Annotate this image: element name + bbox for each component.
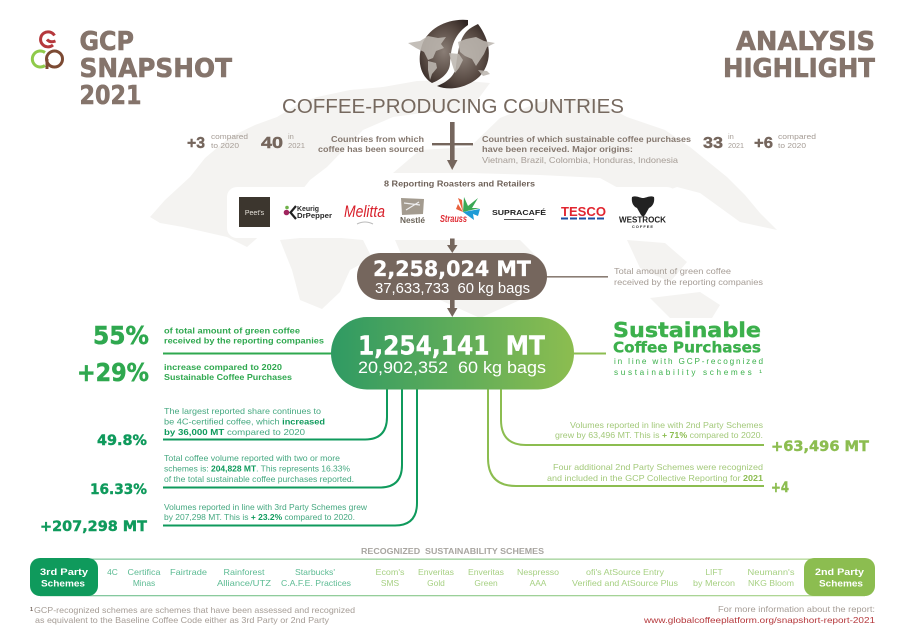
stats: sustainable purchase countries [482, 132, 816, 165]
2nd party scheme names: by Mercon [693, 578, 735, 588]
footnote: as equivalent to the Baseline Coffee Code either as 3rd Party or 2nd Party [35, 616, 330, 625]
stat: plus 63,496 MT: grew by 63,496 MT. This is + 71% compared to 2020. [555, 430, 763, 440]
2nd party scheme names: SMS [381, 578, 399, 588]
note: total amount: received by the reporting companies [614, 278, 763, 287]
sustainable purchases pill: 20,902,352 60 kg bags [358, 359, 546, 377]
footnote [30, 606, 355, 625]
stat: plus 4 [547, 462, 789, 496]
badge: 2nd party: Schemes [819, 578, 863, 590]
background world map [150, 80, 777, 318]
stat: plus 4: +4 [771, 480, 789, 496]
2nd party scheme names: Enveritas [418, 567, 454, 577]
logo: Keurig Dr Pepper [284, 204, 332, 220]
note: total amount: Total amount of green coffee [614, 267, 731, 276]
logo: Nestle: Nestlé [400, 216, 426, 225]
panel: schemes bar [30, 558, 875, 596]
title: Analysis Highlight [723, 27, 876, 84]
stat: plus 207,298 MT [40, 502, 368, 535]
source link [643, 605, 876, 625]
logo: Tesco: TESCO [561, 204, 606, 219]
stat: plus 29 percent: +29% [77, 358, 149, 387]
stats: sustainable purchase countries: Countries of which sustainable coffee purchases [482, 135, 691, 144]
heading: sustainable coffee purchases: Coffee Purchases [613, 338, 761, 356]
logo: Strauss: Strauss [440, 214, 467, 225]
connectors: right branches [488, 354, 764, 486]
total green coffee pill: 37,633,733 60 kg bags [375, 281, 530, 297]
sustainable purchases pill: 1,254,141 MT [358, 332, 545, 362]
badge: 3rd party [30, 558, 98, 596]
2nd party scheme names: AAA [530, 578, 547, 588]
stat: plus 29 percent: increase compared to 2020 [164, 363, 282, 372]
stat: 55 percent: received by the reporting companies [164, 336, 324, 346]
3rd party scheme names: 4C [107, 567, 118, 577]
stat: plus 207,298 MT: +207,298 MT [40, 519, 147, 535]
logo: Westrock [619, 196, 667, 229]
2nd party scheme names: LIFT [705, 567, 723, 577]
2nd party scheme names: Neumann's [748, 567, 794, 577]
2nd party scheme names: Green [474, 578, 498, 588]
footnote: 1 [30, 607, 33, 613]
2nd party scheme names [376, 567, 794, 588]
sustainable purchases pill [331, 317, 574, 390]
stat: 16.33 percent [90, 453, 354, 498]
stat: plus 63,496 MT [555, 420, 869, 455]
stat: plus 207,298 MT: by 207,298 MT. This is + 23.2% compared to 2020. [164, 512, 355, 522]
stats: countries sourced: coffee has been sourced [318, 145, 424, 154]
2nd party scheme names: Enveritas [468, 567, 504, 577]
badge: 3rd party: 3rd Party [40, 567, 89, 578]
2nd party scheme names: Gold [427, 578, 445, 588]
stat: 55 percent [93, 321, 324, 350]
arrow: total to sustainable [447, 300, 458, 317]
logo: Westrock: WESTROCK [619, 214, 667, 224]
connector: total note [545, 276, 608, 278]
3rd party scheme names: Certifica [128, 567, 161, 577]
title: GCP Snapshot 2021: 2021 [80, 81, 142, 111]
3rd party scheme names: Fairtrade [170, 567, 207, 577]
stat: 49.8 percent: by 36,000 MT compared to 2020 [164, 427, 305, 437]
heading: sustainable coffee purchases: sustainability schemes ¹ [614, 368, 762, 377]
connectors: left branches [163, 354, 417, 526]
stat: 55 percent: 55% [93, 321, 149, 350]
3rd party scheme names: C.A.F.E. Practices [281, 578, 351, 588]
logo: GCP [32, 32, 62, 69]
stat: 16.33 percent: Total coffee volume reported with two or more [164, 453, 340, 463]
3rd party scheme names: Minas [133, 578, 155, 588]
logo: Supracafe [492, 208, 546, 220]
stats: sustainable purchase countries: in [728, 132, 734, 141]
source link: www.globalcoffeeplatform.org/snapshort-report-2021 [643, 616, 876, 625]
stats: countries sourced: +3 [187, 135, 205, 152]
stats: sustainable purchase countries: 2021 [728, 141, 744, 150]
logo: Westrock: COFFEE [632, 224, 654, 229]
logo: Peet's: Peet's [245, 210, 265, 217]
stat: plus 63,496 MT: +63,496 MT [771, 439, 869, 455]
badge: 2nd party: 2nd Party [815, 567, 865, 578]
logo: Melitta: Melitta [344, 202, 385, 221]
stat: 49.8 percent: 49.8% [97, 433, 147, 449]
title: GCP Snapshot 2021: GCP [80, 27, 134, 57]
stat: 16.33 percent: of the total sustainable coffee purchases reported. [164, 474, 354, 484]
stat: 16.33 percent: 16.33% [90, 482, 147, 498]
note: total amount [614, 267, 763, 287]
stats: sustainable purchase countries: to 2020 [778, 141, 806, 150]
stats: countries sourced [187, 132, 424, 154]
stat: plus 29 percent [77, 358, 292, 387]
logo: Peet's [239, 197, 270, 227]
panel: roaster logos [227, 187, 677, 238]
3rd party scheme names: Starbucks' [295, 567, 335, 577]
stats: countries sourced: 2021 [288, 141, 305, 150]
logo: Nestle [400, 198, 426, 225]
stat: 55 percent: of total amount of green coffee [164, 326, 300, 336]
stats: sustainable purchase countries: have been received. Major origins: [482, 145, 633, 154]
badge: 2nd party [804, 558, 875, 596]
3rd party scheme names [107, 567, 351, 588]
badge: 3rd party: Schemes [41, 578, 85, 590]
arrow: roasters to total [447, 238, 458, 253]
stat: 49.8 percent [97, 406, 325, 449]
heading: sustainable coffee purchases: Sustainable [613, 318, 761, 342]
stat: plus 207,298 MT: Volumes reported in line with 3rd Party Schemes grew [164, 502, 368, 512]
heading: reporting roasters: 8 Reporting Roasters and Retailers [384, 180, 535, 188]
title: GCP Snapshot 2021 [80, 27, 233, 111]
title: Analysis Highlight: ANALYSIS [736, 27, 875, 57]
stats: sustainable purchase countries: Vietnam, Brazil, Colombia, Honduras, Indonesia [482, 156, 678, 165]
heading: sustainable coffee purchases: in line with GCP-recognized [614, 357, 763, 366]
logo: Keurig Dr Pepper: Keurig [297, 204, 319, 213]
3rd party scheme names: Rainforest [224, 567, 265, 577]
stat: 49.8 percent: The largest reported share continues to [164, 406, 321, 416]
2nd party scheme names: Nespresso [517, 567, 559, 577]
stat: plus 4: Four additional 2nd Party Schemes were recognized [553, 462, 763, 472]
total green coffee pill [357, 253, 547, 300]
stats: countries sourced: in [288, 132, 294, 141]
2nd party scheme names: ofi's AtSource Entry [586, 567, 665, 577]
heading: sustainable coffee purchases [613, 318, 763, 377]
3rd party scheme names: Alliance/UTZ [217, 578, 271, 588]
2nd party scheme names: Ecom's [376, 567, 404, 577]
heading: recognized schemes: RECOGNIZED SUSTAINABILITY SCHEMES [361, 547, 545, 556]
title: Analysis Highlight: HIGHLIGHT [723, 54, 876, 84]
logo: Strauss [440, 197, 480, 225]
stats: sustainable purchase countries: 33 [703, 135, 723, 152]
total green coffee pill: 2,258,024 MT [373, 257, 531, 282]
stat: plus 63,496 MT: Volumes reported in line with 2nd Party Schemes [570, 420, 763, 430]
logo: Supracafe: SUPRACAFÉ [492, 208, 546, 217]
2nd party scheme names: Verified and AtSource Plus [572, 578, 678, 588]
stat: plus 29 percent: Sustainable Coffee Purchases [164, 373, 292, 382]
2nd party scheme names: NKG Bloom [748, 578, 794, 588]
footnote: GCP-recognized schemes are schemes that have been assessed and recognized [34, 606, 355, 615]
source link: For more information about the report: [718, 605, 875, 614]
stat: 49.8 percent: be 4C-certified coffee, which increased [164, 416, 325, 426]
stats: countries sourced: to 2020 [211, 141, 239, 150]
stats: countries sourced: compared [211, 132, 248, 141]
icon: coffee bean with world map [408, 20, 495, 88]
logo: Keurig Dr Pepper: DrPepper [297, 211, 332, 220]
stats: countries sourced: 40 [261, 135, 283, 152]
stats: countries sourced: Countries from which [331, 135, 424, 144]
stats: sustainable purchase countries: compared [778, 132, 816, 141]
title: GCP Snapshot 2021: SNAPSHOT [80, 54, 233, 84]
stats: sustainable purchase countries: +6 [754, 135, 773, 152]
arrow: cross connector [432, 122, 473, 170]
stat: plus 4: and included in the GCP Collective Reporting for 2021 [547, 473, 763, 483]
stat: 16.33 percent: schemes is: 204,828 MT. This represents 16.33% [164, 464, 351, 474]
heading: coffee-producing countries: COFFEE-PRODUCING COUNTRIES [282, 95, 624, 118]
